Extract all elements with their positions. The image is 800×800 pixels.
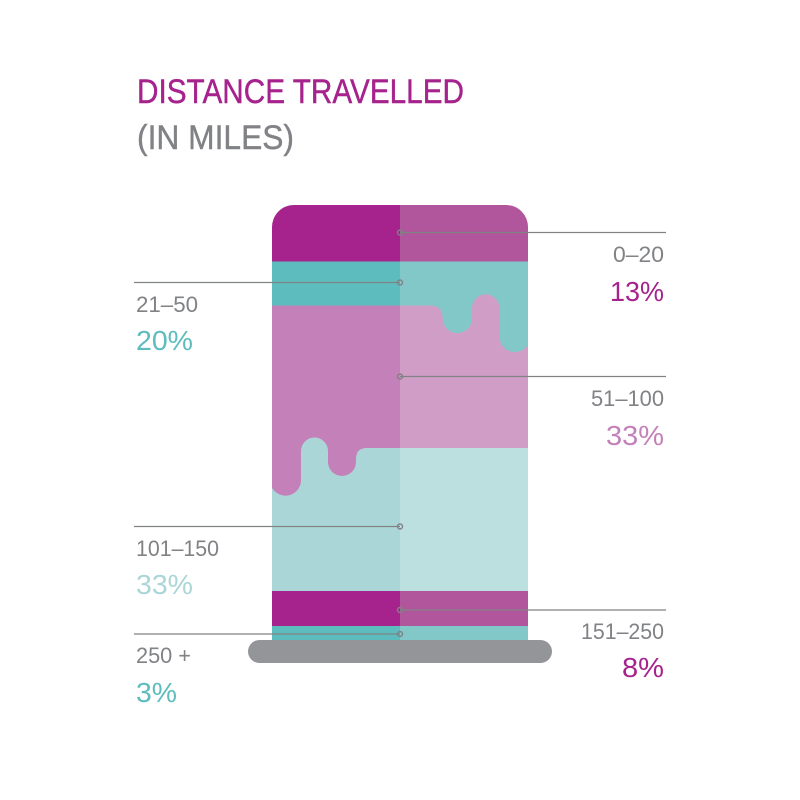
callout: 101-150 [134, 524, 402, 600]
callout: 250+ [134, 632, 402, 708]
callout: 151-250: 151–250 [581, 619, 664, 644]
callout: 250+: 3% [136, 677, 177, 708]
callout: 0-20: 0–20 [613, 242, 664, 267]
infographic: distance travelled [134, 79, 666, 702]
base [248, 640, 552, 663]
title: (IN MILES) [137, 119, 294, 157]
callout: 51-100: 51–100 [591, 386, 664, 411]
callout: 250+: 250 + [136, 643, 191, 668]
callout: 51-100 [398, 374, 666, 451]
callout: 21-50: 21–50 [136, 292, 198, 317]
callout: 21-50 [134, 280, 402, 356]
callout: 101-150: 33% [136, 569, 193, 600]
title [137, 73, 464, 157]
callout: 51-100: 33% [606, 420, 664, 451]
callout: 0-20: 13% [610, 276, 664, 307]
callout: 151-250: 8% [622, 652, 664, 683]
callout: 101-150: 101–150 [136, 536, 219, 561]
callout: 0-20 [398, 230, 666, 307]
chart: cylinder of stacked bands [270, 205, 530, 640]
title: DISTANCE TRAVELLED [137, 73, 464, 111]
callout: 151-250 [398, 608, 666, 683]
callout: 21-50: 20% [136, 325, 193, 356]
